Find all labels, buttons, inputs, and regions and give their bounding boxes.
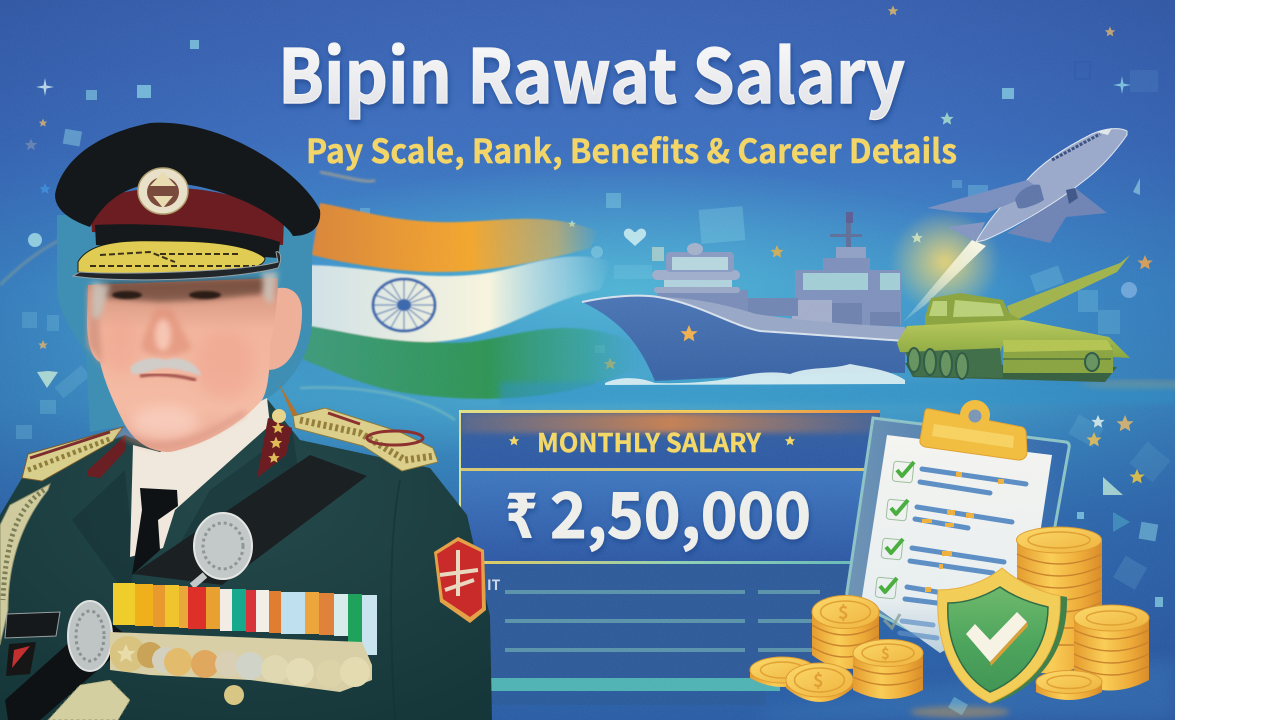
coin stack: left: $	[838, 599, 849, 625]
lower aiguillette	[48, 680, 130, 720]
tie	[132, 488, 178, 575]
shoulder patch	[434, 537, 486, 623]
warship	[582, 212, 905, 381]
panel details rows: IT	[487, 575, 501, 595]
panel header: monthly salary	[461, 413, 880, 471]
coin: front small	[1036, 670, 1102, 700]
panel amount	[461, 466, 861, 564]
coin stack: lower: $	[881, 643, 890, 664]
coin: flat left	[750, 657, 815, 687]
coin: flat front: $	[813, 667, 824, 693]
right epaulette	[278, 382, 438, 471]
moustache	[130, 358, 202, 376]
panel header: monthly salary: MONTHLY SALARY	[537, 423, 761, 460]
coin stack: lower	[853, 640, 923, 699]
name plate	[5, 612, 60, 638]
salary panel	[459, 410, 880, 705]
left silver boss	[68, 601, 112, 671]
cap badge	[138, 168, 188, 214]
subtitle: Pay Scale, Rank, Benefits & Career Details	[306, 125, 957, 173]
panel details rows	[461, 564, 861, 705]
right arm seam	[391, 480, 400, 720]
left epaulette	[22, 427, 123, 481]
jacket button	[224, 685, 244, 705]
checklist rows	[875, 461, 1026, 638]
left aiguillette	[0, 484, 50, 645]
panel amount: 2,50,000	[550, 466, 811, 557]
jacket lapel shading	[72, 430, 300, 600]
right collar tab with stars	[257, 409, 292, 478]
insignia red chevron	[12, 646, 30, 668]
medal ribbons	[113, 583, 377, 655]
title: Bipin Rawat Salary	[278, 18, 905, 125]
face	[87, 278, 278, 452]
left collar tab	[87, 436, 126, 478]
coin stack: tall back	[1016, 527, 1102, 673]
shield with check	[938, 568, 1067, 703]
cap brim	[73, 252, 281, 280]
grey hair	[92, 272, 278, 318]
clipboard clip	[920, 400, 1027, 460]
cap gold visor	[78, 241, 265, 274]
clipboard checklist	[847, 400, 1069, 665]
military cap	[55, 123, 320, 280]
coin stack: left	[812, 596, 879, 669]
coin: flat front	[786, 663, 853, 702]
medal row	[110, 632, 372, 692]
sash	[133, 455, 367, 585]
tank	[897, 255, 1130, 382]
jacket	[0, 400, 492, 720]
portrait: general in uniform	[0, 123, 492, 720]
name plate insignia	[6, 642, 36, 676]
silver medallion	[192, 513, 252, 586]
face shading	[88, 278, 268, 445]
water and waves	[500, 364, 1175, 404]
ear right	[268, 288, 302, 370]
coin stack: right	[1074, 605, 1149, 691]
blank right margin	[1175, 0, 1280, 720]
collar shirt	[130, 398, 270, 557]
lower sash	[5, 615, 133, 720]
jet	[890, 128, 1127, 322]
halo behind portrait	[57, 215, 312, 432]
indian flag	[300, 203, 640, 399]
panel amount: ₹	[505, 480, 538, 553]
mouth	[140, 375, 196, 380]
